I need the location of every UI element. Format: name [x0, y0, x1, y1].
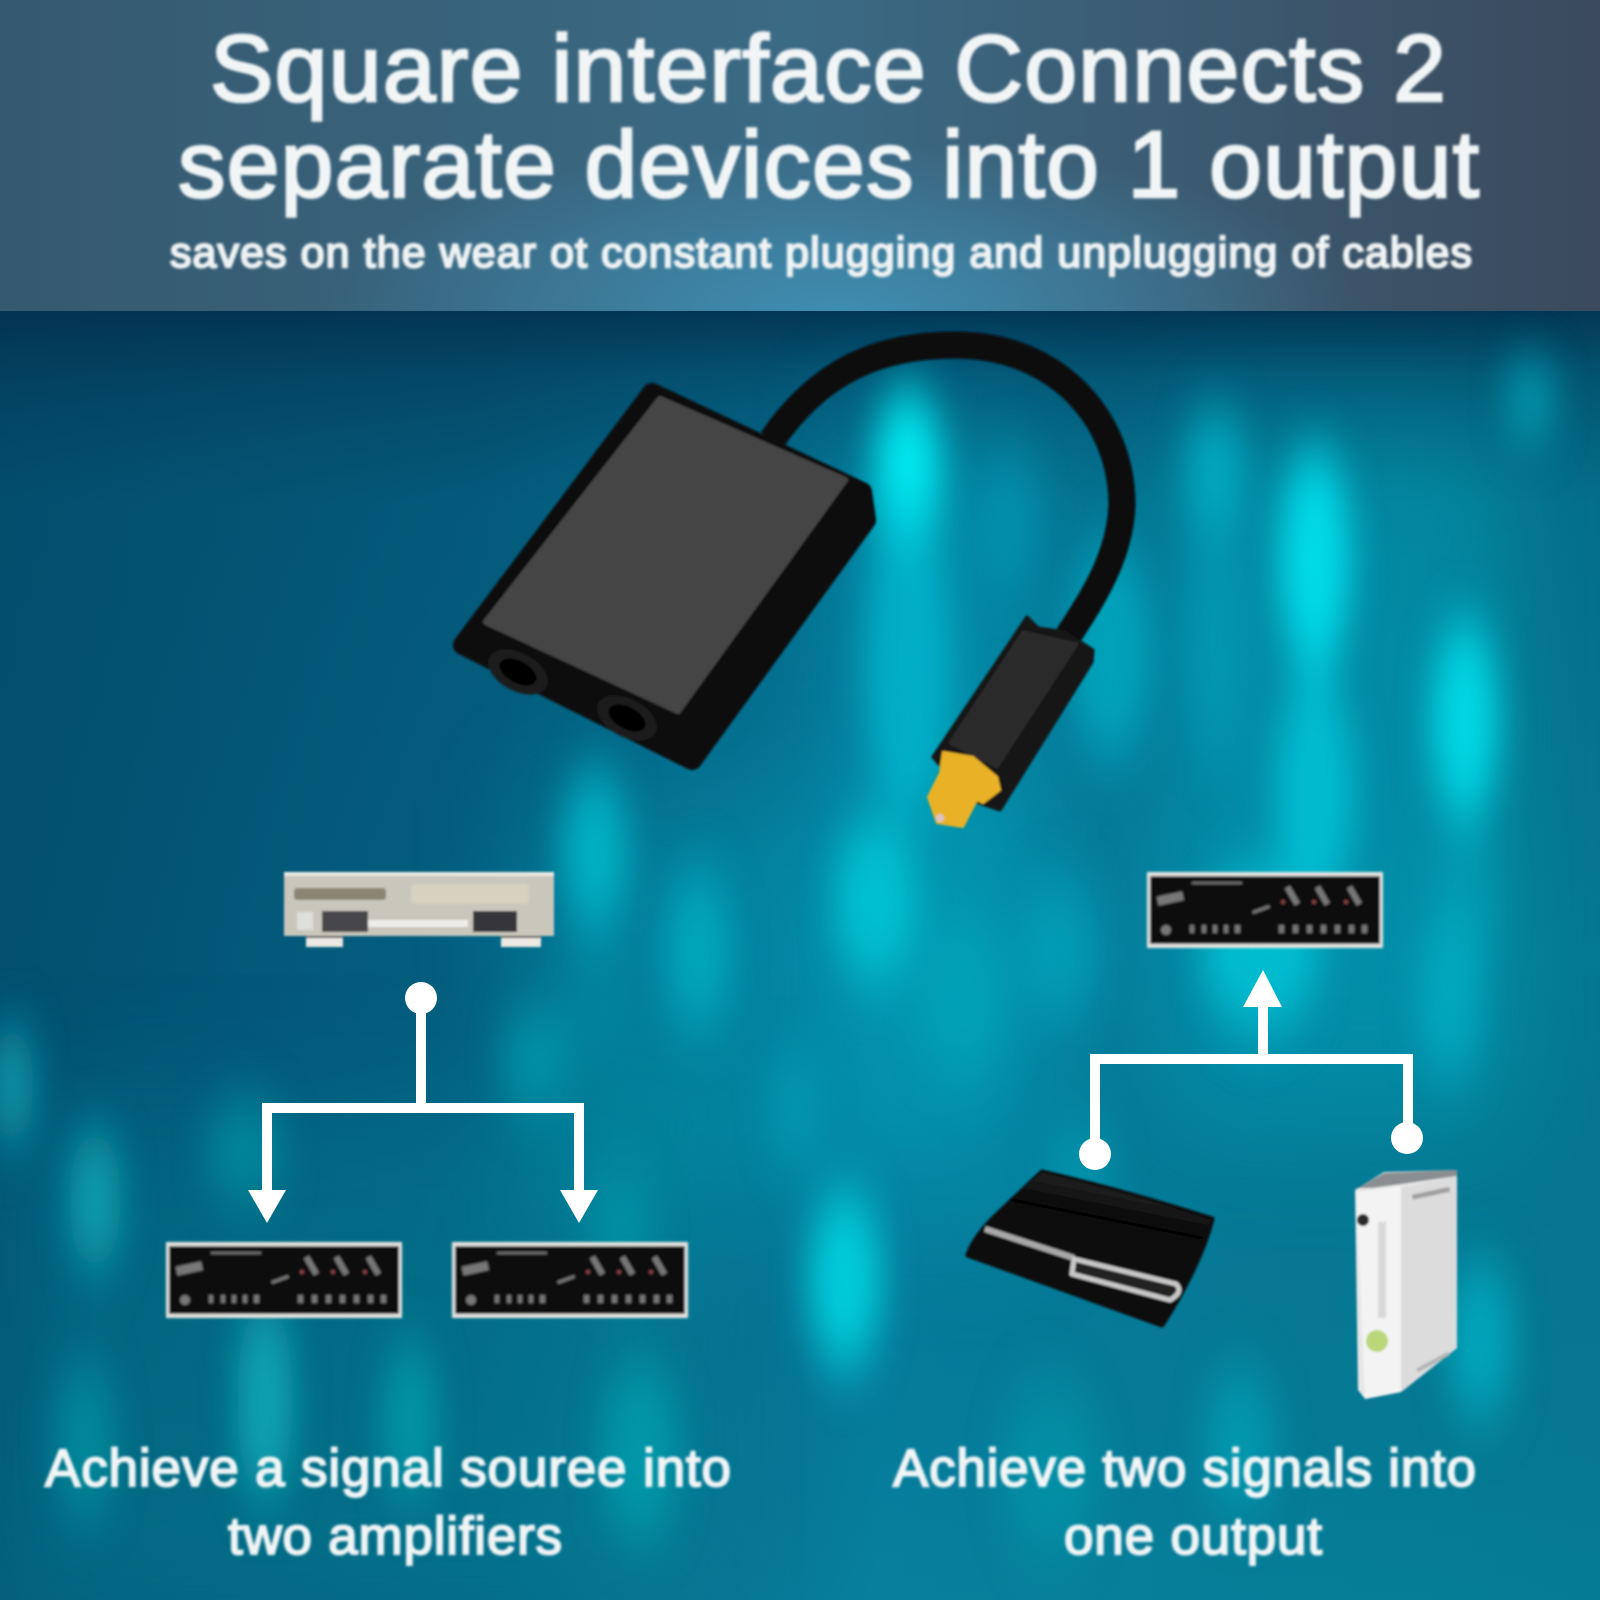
- title: Square interface Connects 2: [210, 16, 1446, 122]
- caption right: one output: [1064, 1507, 1322, 1566]
- title: separate devices into 1 output: [178, 112, 1479, 218]
- splitter top face: [486, 399, 845, 711]
- arrow up: [1243, 970, 1282, 1007]
- plug gold ferrule: [928, 752, 1000, 827]
- arrow down right: [560, 1190, 598, 1223]
- input port right: [590, 686, 664, 750]
- amplifier output right: [1147, 872, 1383, 948]
- connector node left: [1079, 1138, 1111, 1170]
- caption right: [893, 1439, 1476, 1566]
- source device: DVD player: [284, 872, 554, 947]
- amplifier left 2: [452, 1242, 688, 1318]
- plug face: [950, 632, 1077, 767]
- subtitle: saves on the wear ot constant plugging and unplugging of cables: [170, 229, 1472, 277]
- diagram left: one source into two amplifiers: [248, 982, 598, 1223]
- input port left: [481, 640, 555, 704]
- caption right: Achieve two signals into: [893, 1439, 1476, 1498]
- plug housing: [933, 617, 1093, 810]
- cable: [772, 345, 1122, 636]
- header band: [0, 0, 1600, 311]
- splitting connector lines: [267, 998, 579, 1193]
- product: optical splitter adapter: [463, 345, 1122, 827]
- amplifier left 1: [166, 1242, 402, 1318]
- game console: white tower console: [1355, 1170, 1457, 1399]
- splitter body: [463, 393, 866, 760]
- game console: black slim console: [968, 1172, 1212, 1325]
- connector node: [405, 982, 437, 1014]
- caption left: two amplifiers: [228, 1507, 562, 1566]
- diagram right: two signals into one output: [1079, 970, 1423, 1170]
- caption left: [45, 1439, 731, 1566]
- connector node right: [1391, 1122, 1423, 1154]
- joining connector lines: [1095, 1000, 1408, 1154]
- caption left: Achieve a signal souree into: [45, 1439, 731, 1498]
- arrow down left: [248, 1190, 286, 1223]
- plug tip: [936, 814, 944, 822]
- title: [178, 16, 1479, 218]
